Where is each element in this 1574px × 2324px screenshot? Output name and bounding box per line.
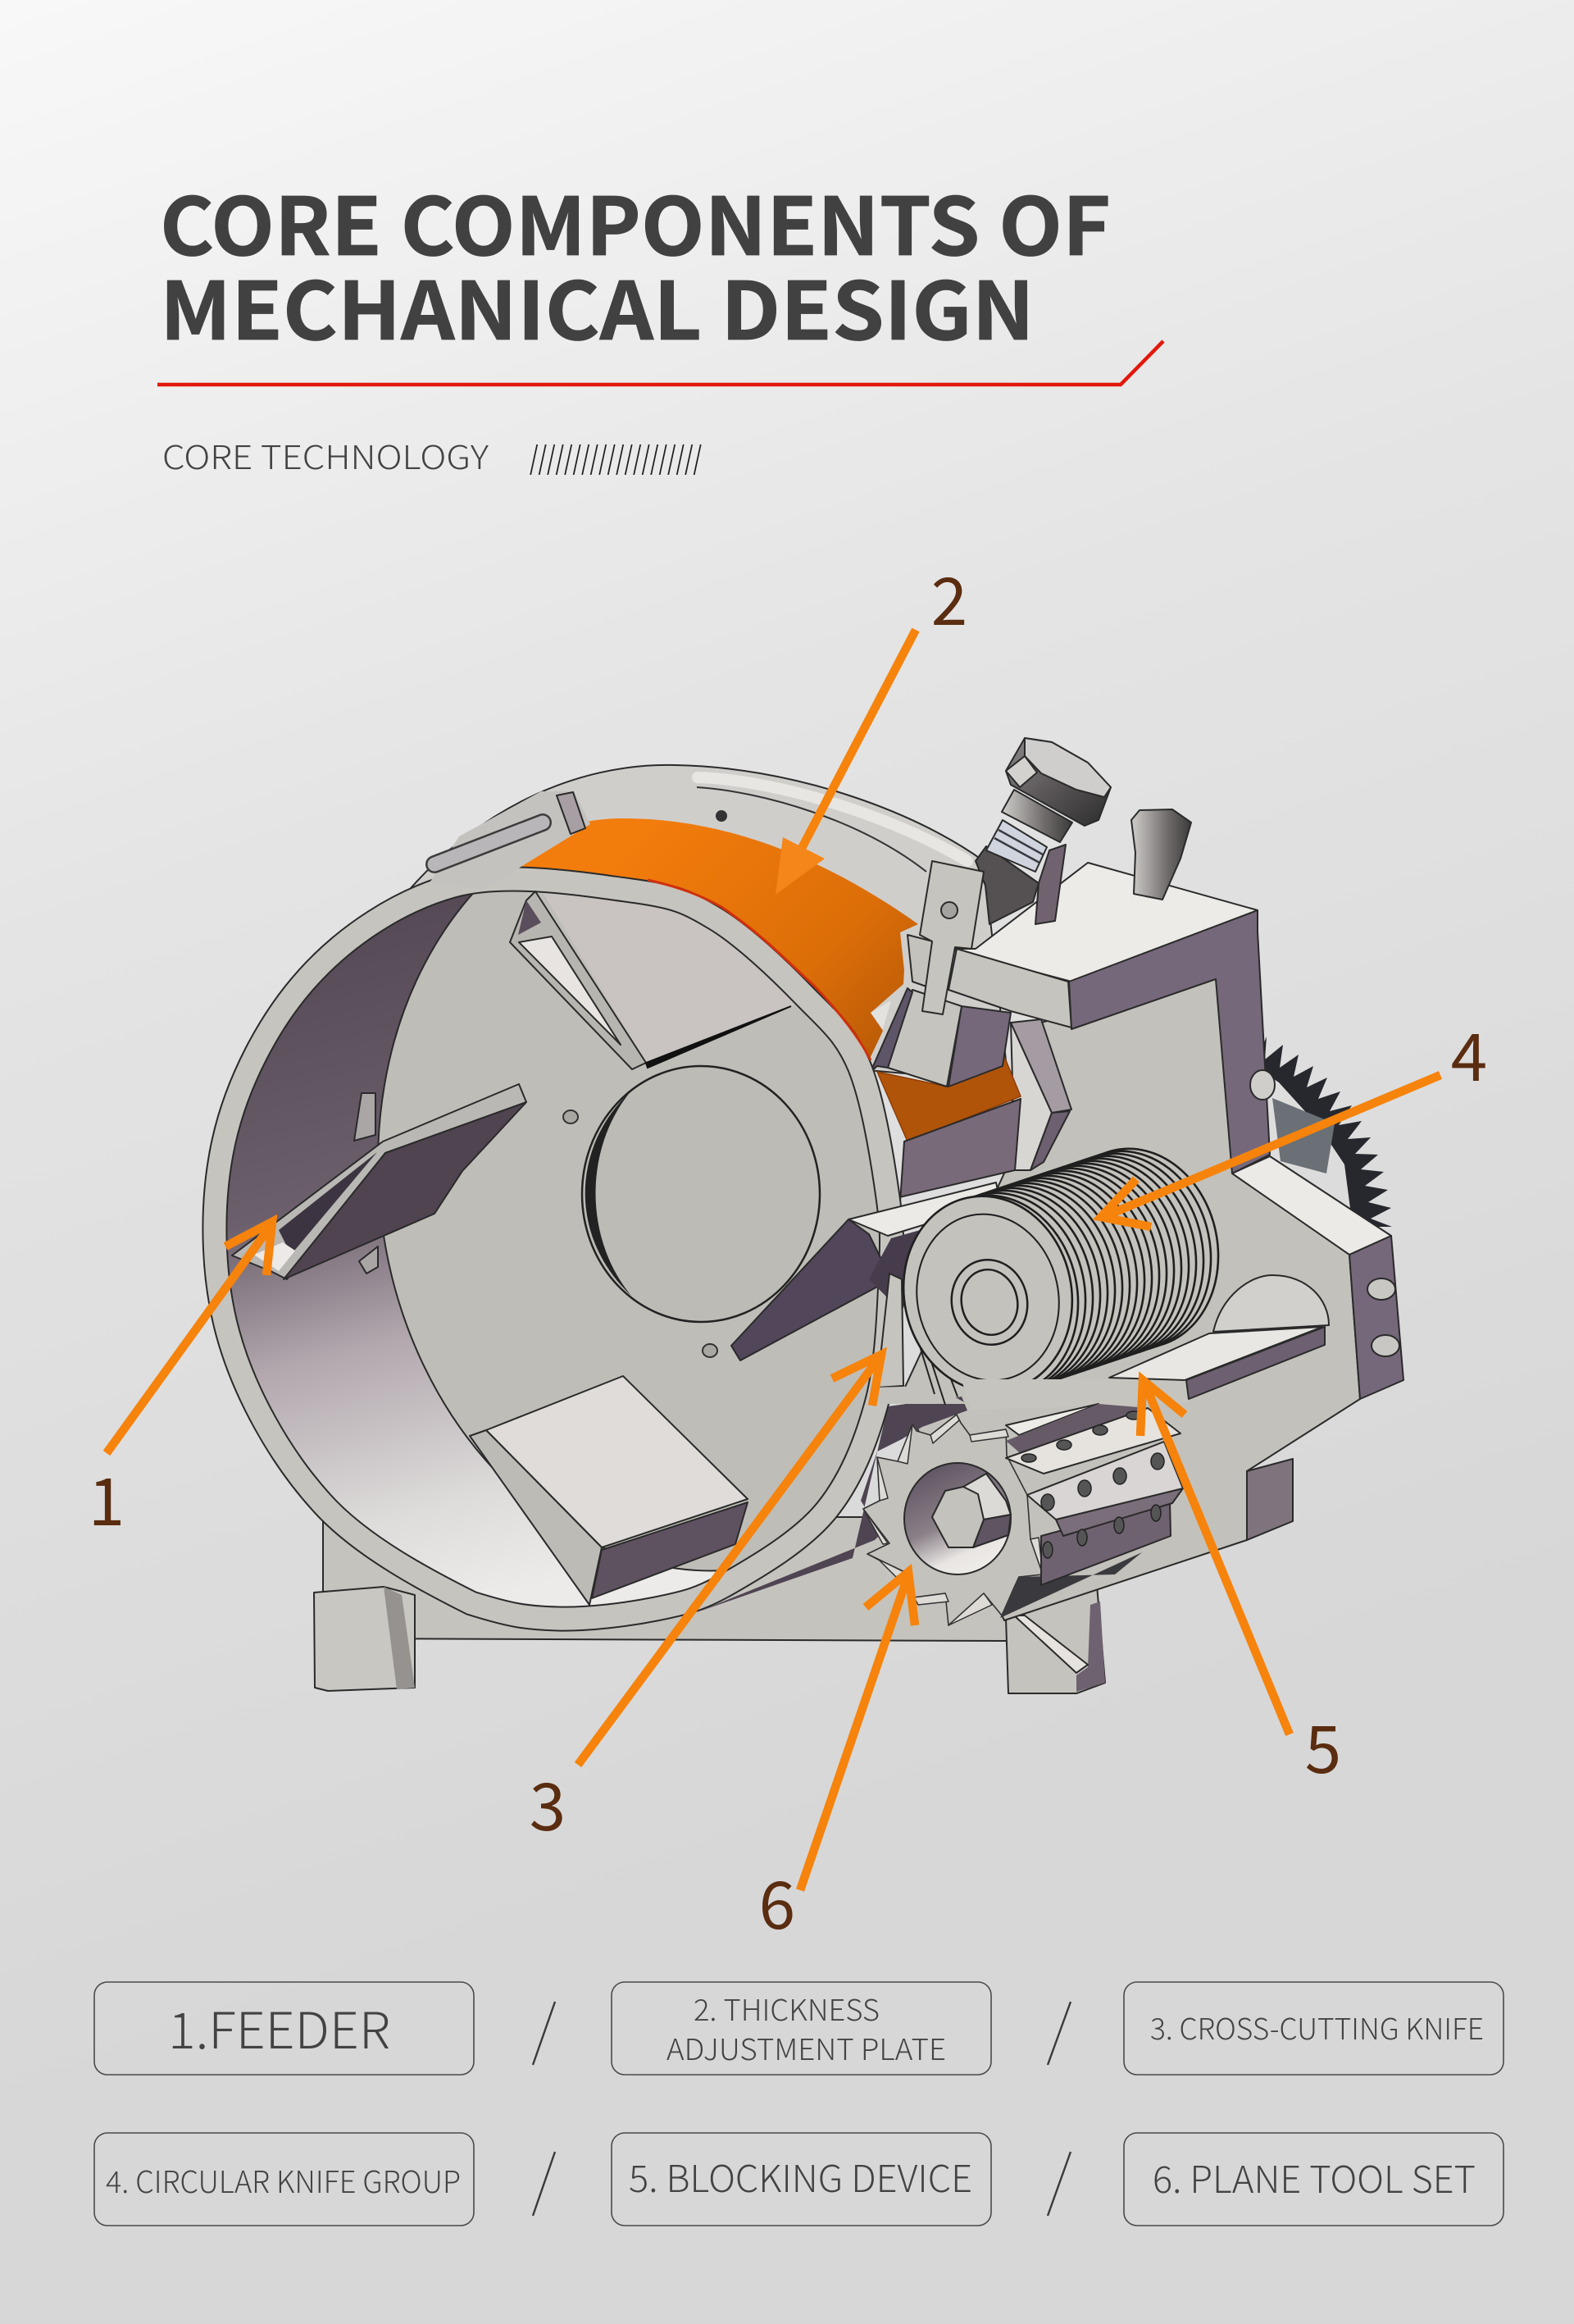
- left feeder vane: [232, 1084, 526, 1279]
- title: [160, 162, 1111, 362]
- dark rim hole: [716, 810, 727, 822]
- subtitle: ////////////////////: [530, 433, 702, 478]
- side housing wall: [902, 976, 1360, 1620]
- arrow 1: [107, 1222, 272, 1453]
- slash divider: [1048, 2002, 1071, 2065]
- plane tool cutter head: [863, 1415, 1043, 1625]
- callout numbers: 3: [530, 1755, 566, 1850]
- slash divider: [533, 2002, 555, 2065]
- drum front ring: [215, 879, 892, 1619]
- callout numbers: 5: [1305, 1697, 1341, 1793]
- drum interior wall: [215, 879, 892, 1619]
- subtitle: [162, 431, 702, 479]
- top block upper face: [948, 863, 1258, 982]
- orange thickness plate: [480, 818, 918, 1066]
- callout numbers: 4: [1451, 1005, 1487, 1100]
- label: circular knife group: 4. CIRCULAR KNIFE GROUP: [106, 2158, 461, 2202]
- front beam: [948, 949, 1071, 1028]
- plane tool blades: [1000, 1404, 1183, 1618]
- label: plane tool set: [1124, 2133, 1503, 2226]
- arrow 2: [776, 630, 916, 895]
- knob: [1131, 809, 1191, 900]
- machine illustration: [107, 630, 1440, 1890]
- callout numbers: 1: [89, 1450, 125, 1545]
- back drum rim: [406, 765, 1008, 1082]
- label: blocking device: [612, 2133, 991, 2226]
- arrow 5: [1140, 1380, 1290, 1734]
- housing shoulder: [1232, 1156, 1391, 1255]
- cross-cutting knife: [877, 1274, 903, 1388]
- title underline: [157, 341, 1163, 385]
- arrow 4: [1101, 1075, 1440, 1227]
- label: cross-cutting knife: [1124, 1982, 1503, 2075]
- rear ring band: [1011, 1019, 1071, 1170]
- rim highlight: [698, 777, 967, 861]
- label: feeder: 1.FEEDER: [168, 1990, 390, 2063]
- label: plane tool set: 6. PLANE TOOL SET: [1153, 2150, 1476, 2203]
- callout numbers: 2: [931, 549, 967, 645]
- bolts: [1250, 1070, 1399, 1356]
- purple block: [899, 1099, 1021, 1214]
- screw holes: [563, 1110, 717, 1357]
- knife bracket: [871, 1386, 967, 1404]
- label: thickness adjustment plate: [612, 1982, 991, 2075]
- half disc: [1213, 1275, 1329, 1332]
- title: MECHANICAL DESIGN: [160, 247, 1035, 362]
- slash divider: [1048, 2152, 1071, 2216]
- label: thickness adjustment plate: ADJUSTMENT PLATE: [666, 2026, 946, 2069]
- circular knife group: [885, 1133, 1236, 1410]
- label: blocking device: 5. BLOCKING DEVICE: [629, 2149, 972, 2203]
- label: thickness adjustment plate: 2. THICKNESS: [694, 1987, 880, 2030]
- slash divider: [533, 2152, 555, 2216]
- arrow 3: [578, 1355, 881, 1765]
- red plate edge: [648, 880, 871, 1060]
- dark lower cavity: [697, 1397, 967, 1612]
- top vane: [510, 891, 791, 1069]
- right vane: [731, 1183, 1000, 1360]
- base frame: [314, 1517, 1017, 1691]
- housing lower block: [1247, 1459, 1293, 1540]
- title: CORE COMPONENTS OF: [160, 162, 1111, 278]
- block side face: [1069, 910, 1270, 1173]
- gear wheel: [1254, 1037, 1392, 1227]
- drum back disc: [377, 892, 879, 1571]
- label: circular knife group: [94, 2133, 474, 2226]
- knife edge streaks: [902, 1287, 958, 1405]
- subtitle: CORE TECHNOLOGY: [162, 431, 489, 479]
- callout numbers: 6: [759, 1853, 795, 1948]
- label: feeder: [94, 1982, 474, 2075]
- label: cross-cutting knife: 3. CROSS-CUTTING KNIFE: [1150, 2006, 1484, 2048]
- right foot: [1006, 1585, 1105, 1693]
- housing end face: [1349, 1236, 1403, 1399]
- pin and bracket: [430, 791, 590, 890]
- lower orange block top: [877, 1056, 1021, 1141]
- clamp assembly: [871, 861, 1011, 1087]
- callout numbers: [89, 549, 1487, 1948]
- bottom vane: [470, 1376, 748, 1605]
- arrow 6: [800, 1572, 915, 1890]
- rim inner line: [697, 787, 926, 872]
- notch highlight: [871, 1000, 891, 1029]
- blocking device plate: [962, 1327, 1325, 1409]
- center circle: [582, 1066, 820, 1322]
- adjusting bolt and spring: [976, 738, 1111, 924]
